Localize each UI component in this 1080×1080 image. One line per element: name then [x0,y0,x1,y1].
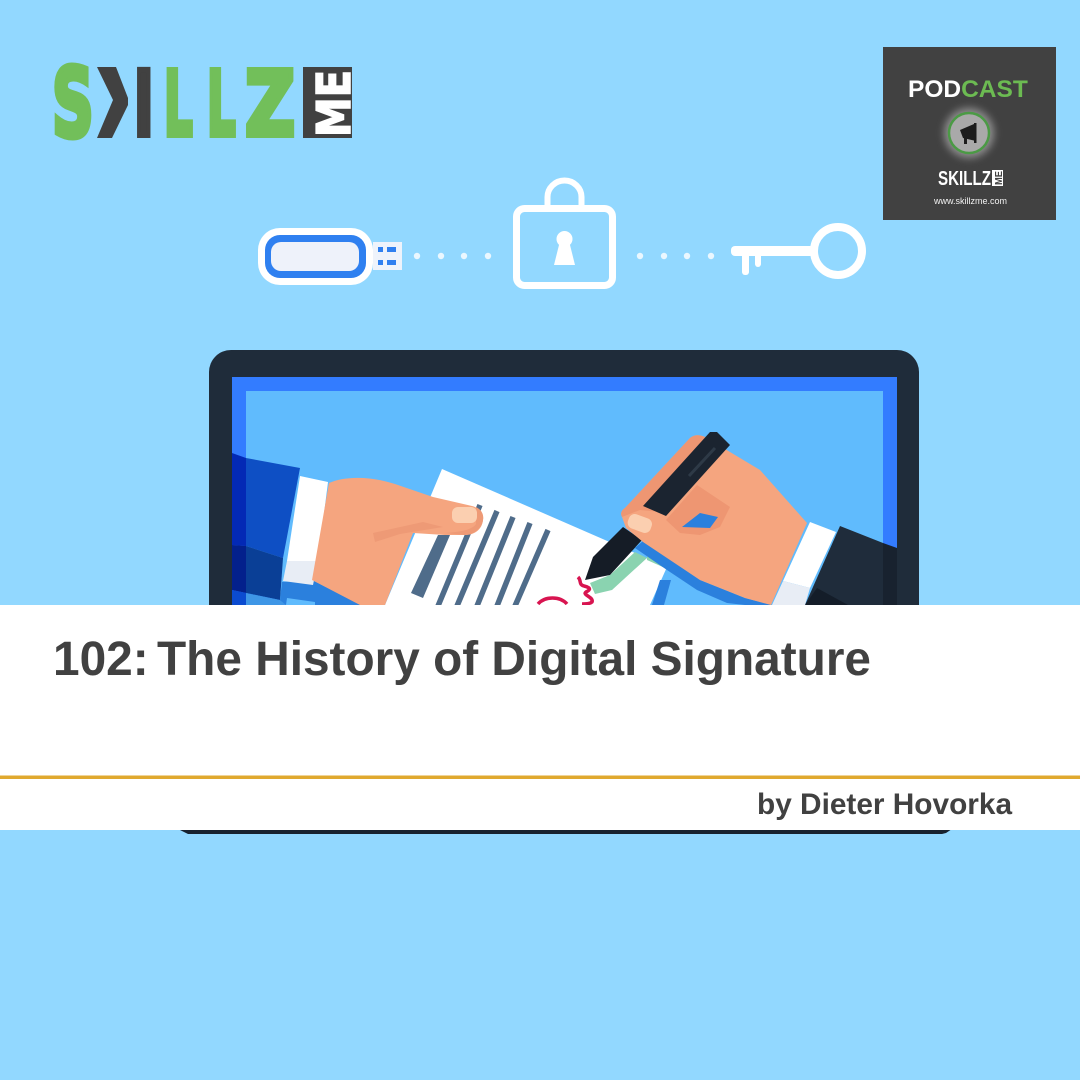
title: 102: [53,633,149,686]
pen body [643,432,730,516]
right sleeve [805,526,897,605]
gold divider [0,776,1080,779]
left cuff [283,476,328,585]
left hand [312,478,483,605]
small logo: ME [994,171,1005,185]
pen tip [585,527,642,580]
website: www.skillzme.com [933,196,1007,206]
signature [538,577,592,604]
logo: SkillzMe: L [164,53,193,156]
laptop bezel [209,350,919,605]
left sleeve [232,453,300,605]
podcast label: PODCAST [908,76,1028,103]
logo: SkillzMe: I [134,53,154,157]
icon: usb key [258,228,402,285]
icon: megaphone [944,108,994,158]
small logo: SKILLZ [938,168,991,190]
laptop [209,350,919,606]
dots: usb to lock [414,253,491,259]
right hand [621,435,807,605]
white title band [0,605,1080,830]
podcast badge [883,47,1056,220]
document [385,469,671,606]
logo: SkillzMe [52,48,361,159]
shadow under left hand [280,580,362,605]
logo: SkillzMe: ME [307,70,361,137]
laptop base [178,829,952,834]
shadow under right hand [635,541,772,605]
icon: key [731,227,862,275]
logo: SkillzMe: Z [245,52,295,156]
right cuff [772,522,836,605]
logo: SkillzMe: L [207,53,236,156]
laptop screen [232,377,897,605]
logo: SkillzMe: S [52,48,94,159]
dots: lock to key [637,253,714,259]
title: The History of Digital Signature [157,633,871,686]
pen shadow [590,552,667,594]
icon: padlock [516,181,612,286]
author: by Dieter Hovorka [757,788,1012,821]
